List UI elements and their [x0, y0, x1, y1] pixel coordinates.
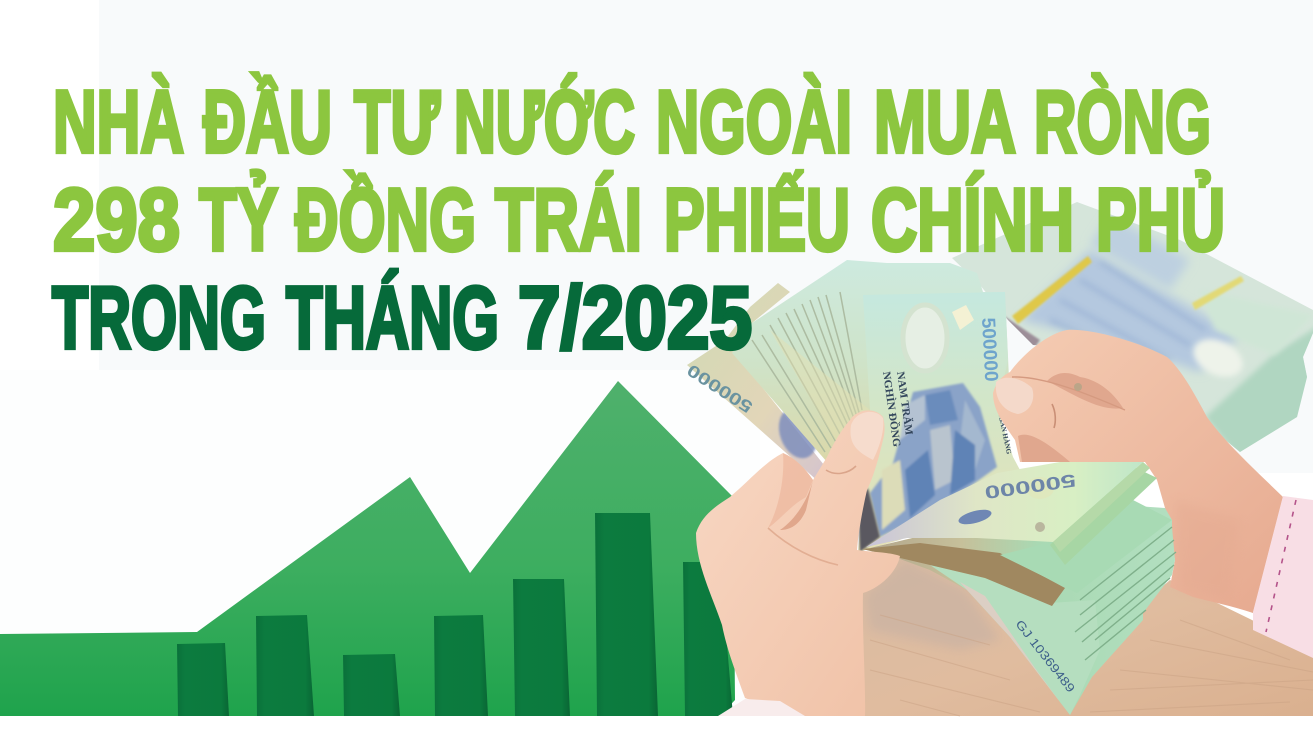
title line 3: TRONG [52, 268, 266, 367]
bar 4 [434, 615, 488, 716]
bar 7 [683, 562, 733, 716]
title line 1: NHÀ [53, 72, 184, 171]
title line 1: TƯ [354, 72, 440, 171]
photo: left hand [696, 410, 900, 716]
title line 1 [53, 72, 1211, 171]
photo: small back banknote [684, 283, 828, 483]
title line 1: NƯỚC [454, 72, 635, 171]
banknote: top note value: 500000 [983, 470, 1077, 503]
bar 6 [595, 513, 658, 716]
title line 1: NGOÀI [656, 72, 852, 171]
title line 1: MUA [874, 72, 1016, 171]
bar 5 [513, 579, 570, 716]
title line 1: RÒNG [1034, 72, 1211, 171]
title line 2: 298 [53, 170, 180, 269]
photo: wooden table [860, 552, 1313, 716]
photo: blurred stack of banknotes [952, 202, 1313, 452]
title line 2: PHIẾU [664, 170, 850, 269]
title line 3: 7/2025 [518, 268, 752, 367]
banknote: front note value: 500000 [977, 317, 1001, 382]
photo: pink shirt cuff [1253, 496, 1313, 658]
title line 2 [53, 170, 1225, 269]
photo: front banknote [858, 292, 1020, 552]
wooden bar chart [177, 513, 733, 716]
bar 2 [256, 615, 314, 716]
bar 1 [177, 643, 229, 716]
banknote: bank name: NGÂN HÀNG [996, 411, 1013, 455]
title line 2: CHÍNH [871, 170, 1074, 269]
photo: lower banknote fan [862, 462, 1176, 715]
title line 2: PHỦ [1096, 170, 1225, 269]
title line 3 [52, 268, 752, 367]
photo: upper banknote fan [732, 260, 1010, 470]
banknote: back note value: 500000 [684, 360, 756, 417]
title line 3: THÁNG [286, 268, 499, 367]
title [52, 72, 1225, 367]
title line 2: ĐỒNG [295, 170, 476, 269]
banknote: denomination NAM TRĂM: NAM TRĂM [894, 371, 915, 436]
banknote: denomination NGHÌN ĐỒNG: NGHÌN ĐỒNG [880, 371, 904, 448]
bar 3 [343, 654, 400, 716]
green mountain chart backdrop [0, 381, 735, 716]
title line 2: TỶ [199, 170, 278, 269]
title line 2: TRÁI [495, 170, 642, 269]
title line 1: ĐẦU [203, 72, 332, 171]
photo: left sleeve [718, 699, 805, 716]
photo: right hand [993, 330, 1283, 613]
banknote: serial number: GJ 10369489 [1013, 617, 1078, 696]
